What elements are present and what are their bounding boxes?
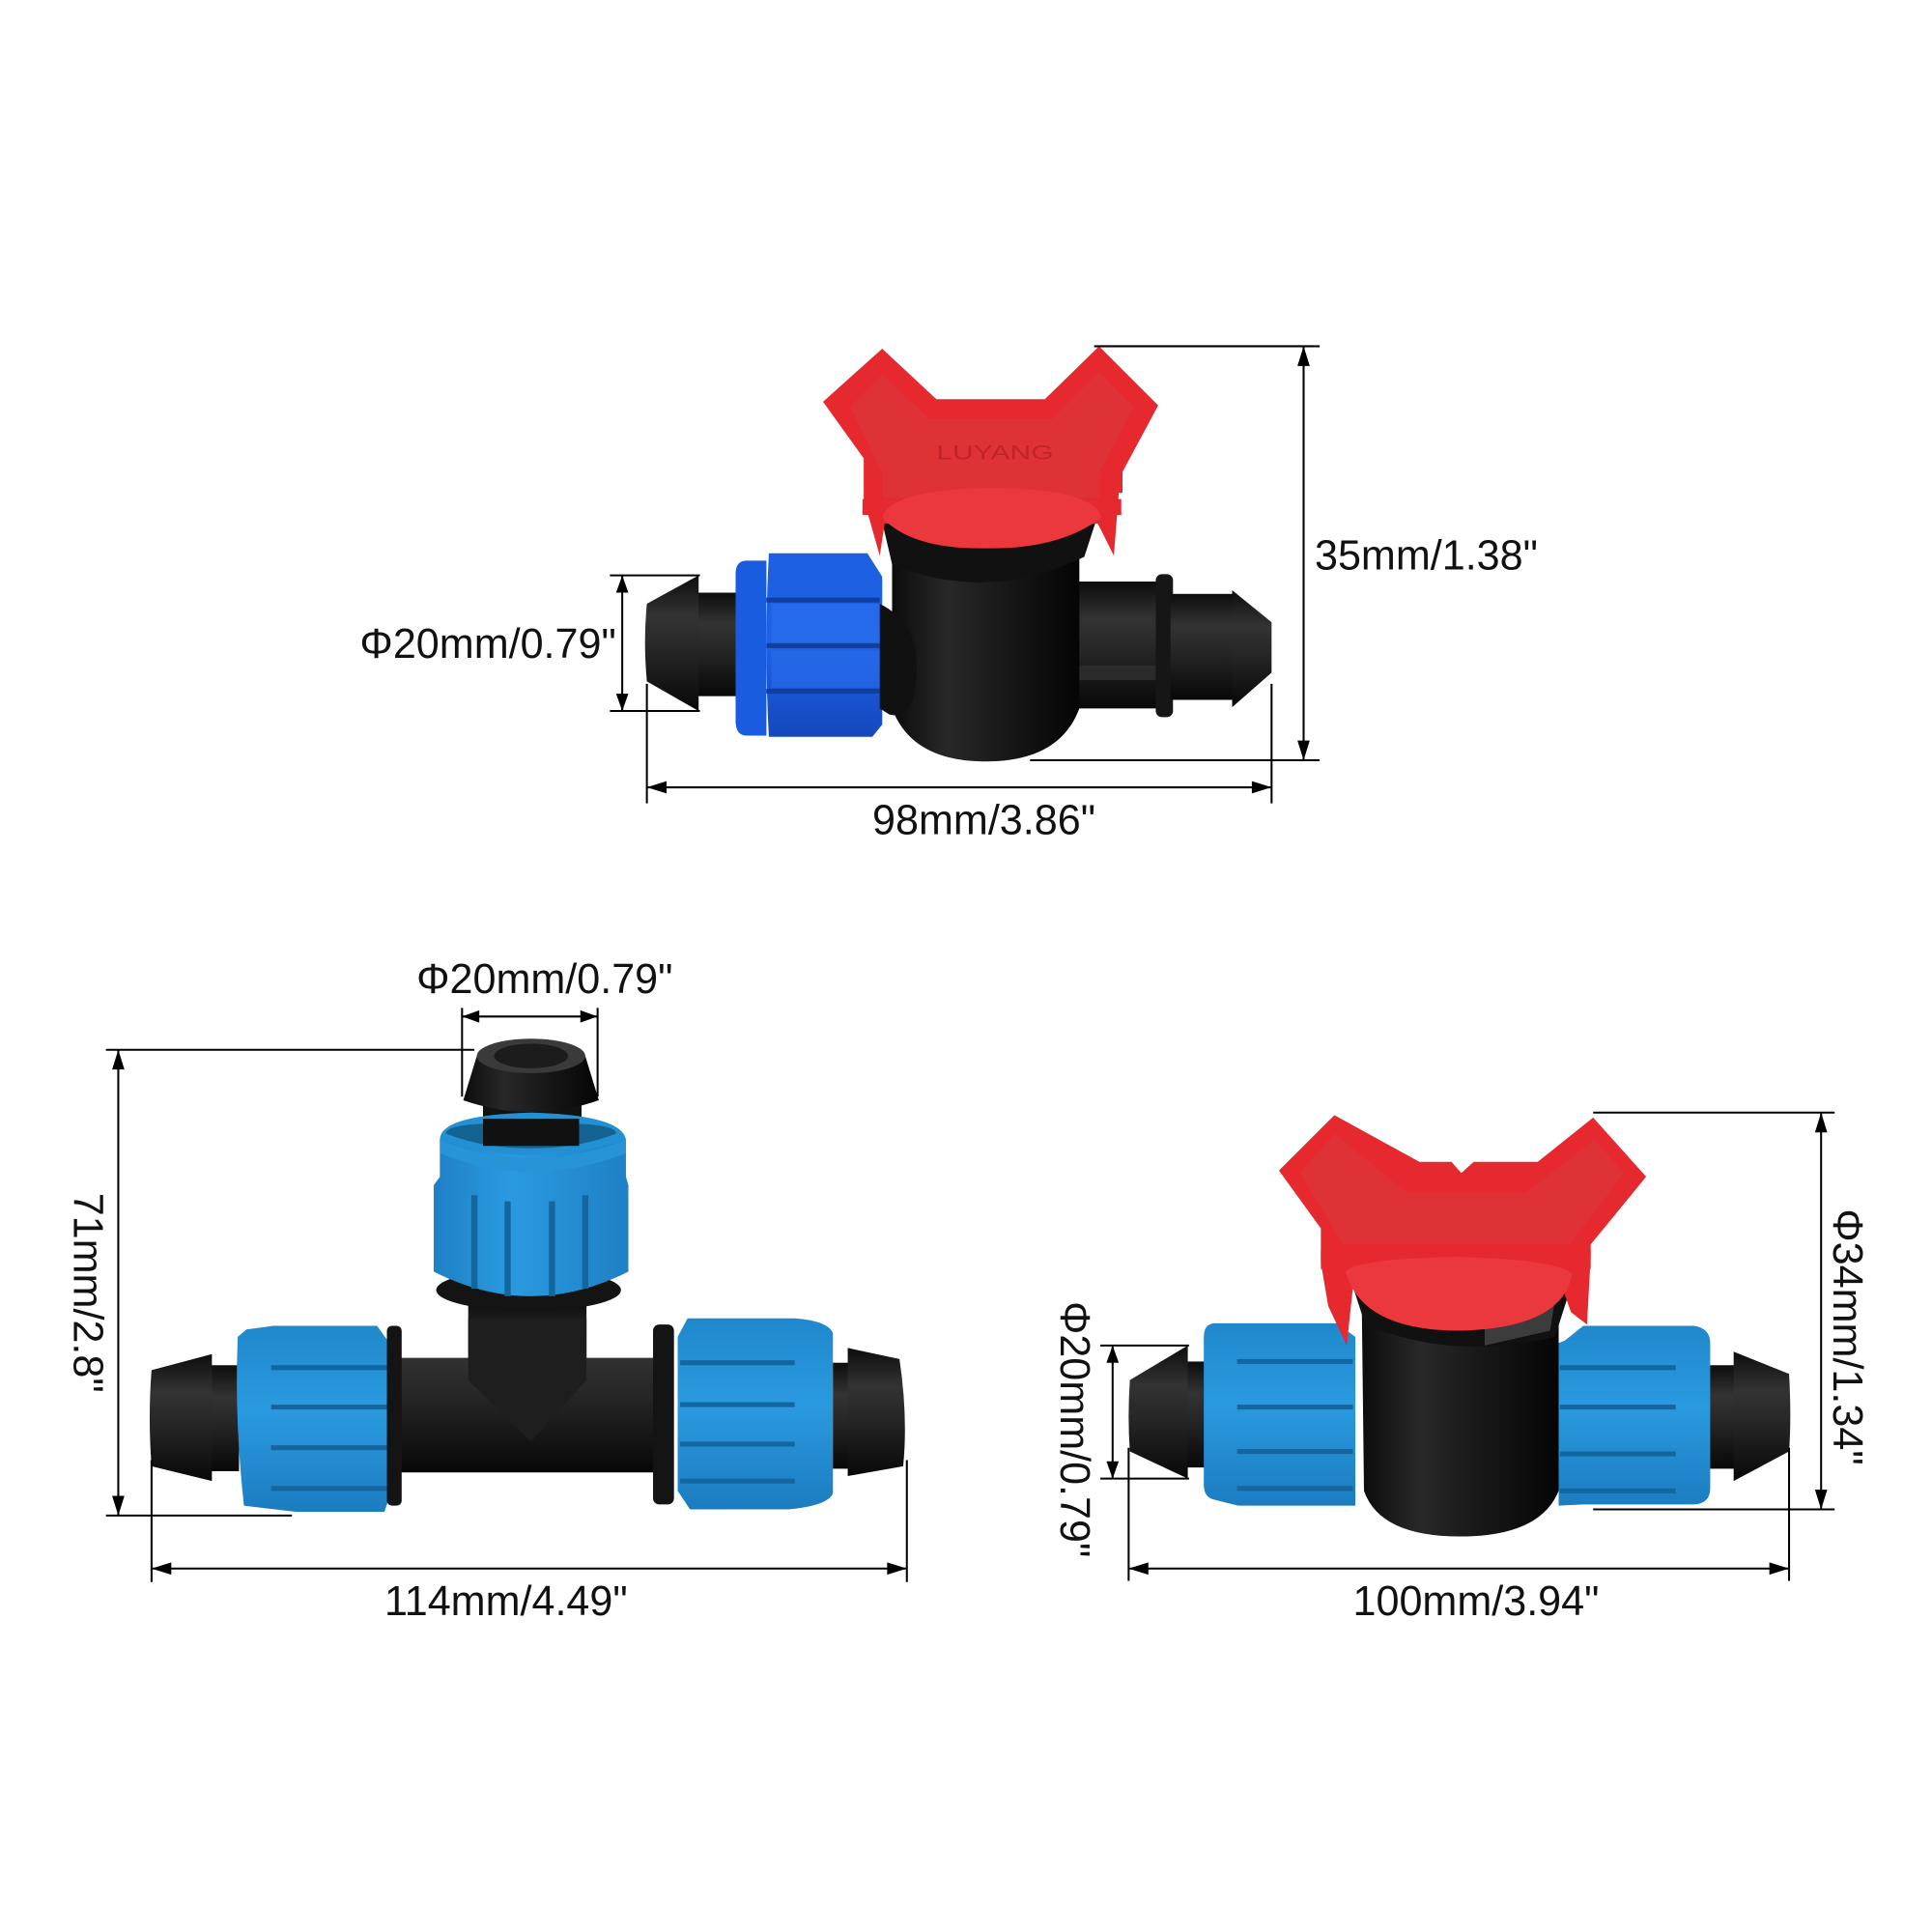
left barb <box>150 1354 239 1481</box>
product: top ball valve <box>645 346 1271 761</box>
top nut <box>434 1113 629 1296</box>
width dimension: 98mm/3.86" <box>872 798 1095 844</box>
dimensions: T connector <box>65 956 907 1625</box>
product: bottom ball valve <box>1128 1115 1790 1537</box>
diameter dimension <box>1051 1301 1189 1557</box>
diameter dimension: Φ20mm/0.79" <box>1051 1301 1097 1557</box>
valve body <box>880 511 1099 761</box>
height dimension <box>1593 1113 1870 1509</box>
valve body <box>1350 1275 1575 1537</box>
right barb <box>1707 1351 1790 1481</box>
product: T connector <box>150 1038 905 1512</box>
width dimension <box>647 684 1271 844</box>
right connector <box>1050 574 1271 717</box>
width dimension <box>1128 1448 1789 1625</box>
height dimension: 71mm/2.8" <box>65 1193 111 1393</box>
dimensions: bottom valve <box>1051 1113 1870 1625</box>
right barb <box>833 1348 905 1476</box>
left nut <box>1204 1323 1355 1506</box>
top washer <box>437 1269 621 1311</box>
diameter dimension <box>416 956 672 1096</box>
right nut <box>1559 1325 1710 1506</box>
height dimension: Φ34mm/1.34" <box>1824 1208 1870 1465</box>
height dimension <box>1030 346 1538 760</box>
height dimension: 35mm/1.38" <box>1315 532 1538 579</box>
width dimension: 114mm/4.49" <box>384 1578 628 1625</box>
red handle <box>823 346 1158 555</box>
top barb <box>464 1038 599 1146</box>
height dimension <box>65 1050 474 1516</box>
blue nut <box>735 554 882 737</box>
diameter dimension: Φ20mm/0.79" <box>359 621 616 668</box>
right washer <box>653 1324 674 1504</box>
diameter dimension <box>359 576 699 711</box>
left nut <box>237 1325 389 1512</box>
embossed brand text: LUYANG <box>936 440 1054 465</box>
width dimension: 100mm/3.94" <box>1353 1578 1599 1625</box>
dimensions: top valve <box>359 346 1538 844</box>
width dimension <box>152 1460 907 1625</box>
T body <box>394 1300 666 1472</box>
left barb <box>1128 1346 1212 1479</box>
red handle <box>1279 1115 1646 1346</box>
diameter dimension: Φ20mm/0.79" <box>416 956 672 1003</box>
left barb <box>645 576 739 711</box>
left washer <box>387 1325 402 1506</box>
right nut <box>678 1319 833 1509</box>
